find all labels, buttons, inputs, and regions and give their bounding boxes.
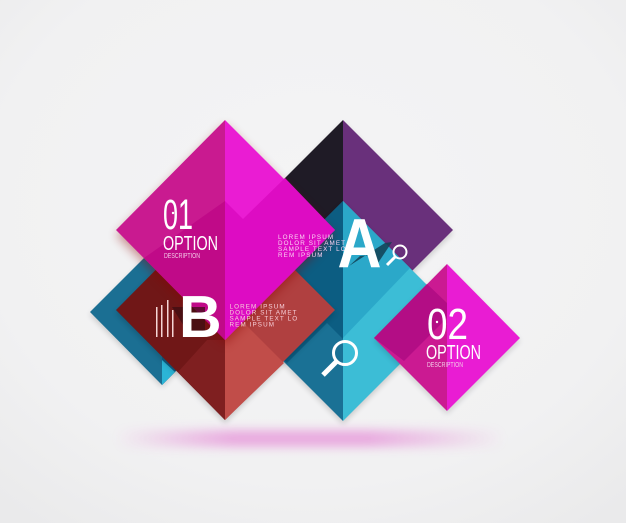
panel: red diamond B xyxy=(116,200,335,423)
label: description 01: DESCRIPTION xyxy=(164,253,200,260)
heading: OPTION 02: OPTION xyxy=(426,342,481,364)
letter B with shadow: B xyxy=(179,284,222,350)
text block: lorem B: LOREM IPSUM xyxy=(230,304,286,310)
panel: back left teal diamond xyxy=(90,240,234,387)
icon: small magnifier xyxy=(387,246,406,265)
icon: magnifier xyxy=(323,342,356,375)
text block: lorem A: REM IPSUM xyxy=(278,252,324,259)
label: description 02: DESCRIPTION xyxy=(427,362,463,369)
text block: lorem A: DOLOR SIT AMET xyxy=(278,240,346,247)
heading: 02: 02 xyxy=(427,300,468,349)
text block: lorem B: SAMPLE TEXT LO xyxy=(230,316,298,322)
text block: lorem B: REM IPSUM xyxy=(230,322,275,328)
panel: magenta diamond 02 xyxy=(374,264,520,414)
letter A with shadow: A xyxy=(338,204,382,282)
floor shadow xyxy=(115,430,505,447)
text block: lorem B: DOLOR SIT AMET xyxy=(230,310,298,316)
text block: lorem A: SAMPLE TEXT LO xyxy=(278,246,347,253)
text block: lorem A: LOREM IPSUM xyxy=(278,234,334,241)
heading: OPTION 01: OPTION xyxy=(163,233,218,255)
heading: 01 xyxy=(163,191,193,239)
heading: 01: 01 xyxy=(163,191,193,239)
icon: bars xyxy=(156,300,174,337)
panel: purple diamond xyxy=(233,120,453,343)
panel: magenta diamond 01 xyxy=(116,120,335,345)
panel: teal diamond xyxy=(233,201,453,424)
